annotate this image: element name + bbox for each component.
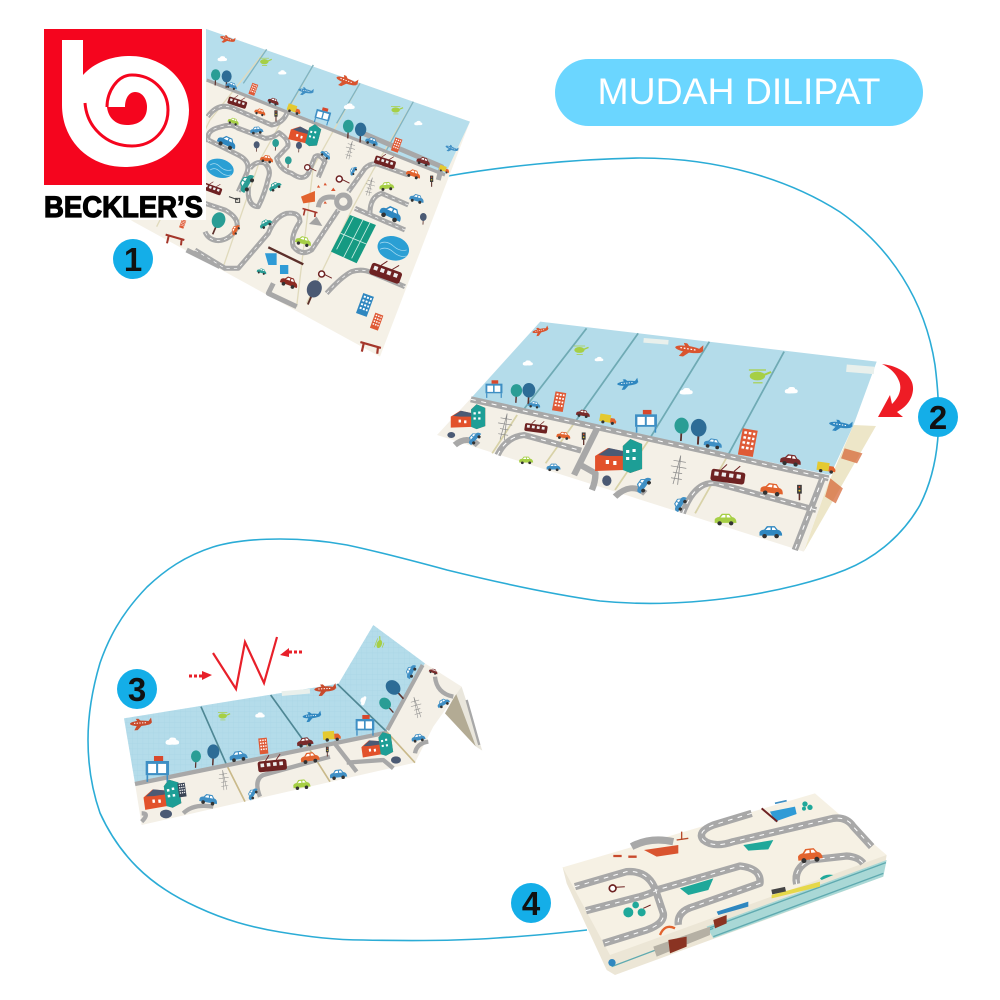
mat 3 illustrations [130, 636, 451, 818]
logo red centre [107, 92, 147, 125]
white backing for logo [40, 25, 206, 220]
mat 3 raised panel grid texture [338, 625, 425, 731]
red curved fold arrow [878, 364, 913, 417]
step badge 1 [113, 239, 153, 279]
mat step 3: mat folding in zigzag [124, 625, 482, 825]
step badge 1: 1 [124, 241, 142, 278]
step badge 3: 3 [128, 671, 146, 708]
mat step 1: fully unfolded play mat [90, 26, 470, 357]
mat 1 sky area [197, 26, 470, 175]
mat 2 illustrations [447, 325, 874, 538]
mat 3 cream ground [135, 732, 415, 825]
mat 2 road network [455, 399, 829, 550]
step badge 2: 2 [929, 399, 947, 436]
mat 4 road network [575, 813, 872, 943]
mat 3 sky grid texture [124, 684, 387, 783]
curved connector line [88, 158, 939, 941]
left dashed arrow [189, 671, 212, 680]
step badge 3 [117, 669, 157, 709]
mat step 2: mat with right panel folded under [437, 322, 877, 552]
heading pill: MUDAH DILIPAT [555, 59, 923, 126]
brand logo: Beckler's [44, 29, 203, 224]
mat 1 road network [187, 80, 445, 307]
mat 2 fold lines [492, 328, 784, 513]
logo red square [44, 29, 202, 185]
mat 4 road dashes [575, 813, 872, 943]
mat 4 top face [563, 793, 887, 955]
mat 1 sky illustrations [211, 33, 459, 174]
mat 1 tennis court [331, 215, 376, 263]
mat 4 side layers [563, 855, 887, 975]
mat 3 sky [124, 684, 387, 783]
mat 4 layer lines [612, 863, 886, 967]
mat 3 fold lines [201, 684, 415, 802]
mat 2 road dashes [471, 399, 829, 550]
mat 3 raised panel sky [338, 625, 425, 731]
step badge 2 [918, 397, 958, 437]
heading text: MUDAH DILIPAT [598, 70, 881, 112]
mat 2 folded underside panel [804, 425, 876, 552]
mat 4 teal edges [707, 860, 887, 938]
logo white spiral [62, 40, 189, 167]
mat step 4: fully folded mat [563, 793, 887, 975]
mat 2 underside colours [825, 448, 862, 503]
mat 2 sky area [471, 322, 877, 475]
mat 4 illustrations [608, 801, 833, 966]
mat 2 cream surface [437, 398, 830, 552]
mat 1 fold lines [157, 49, 413, 307]
zigzag line [213, 637, 277, 689]
mat 1 ground illustrations [166, 93, 433, 354]
logo wordmark: BECKLER’S [44, 191, 203, 224]
red zigzag fold symbol with arrows [189, 637, 302, 689]
step badge 4: 4 [522, 885, 541, 922]
mat 3 road network [135, 665, 479, 822]
heading background [555, 59, 923, 126]
mat 1 road dashes [195, 106, 408, 293]
mat 3 back leg shaded inside [445, 692, 476, 747]
mat 3 raised panel cream [387, 663, 462, 763]
right dashed arrow [280, 648, 302, 657]
logo thin red spiral line [85, 75, 168, 146]
mat 1 ponds [204, 156, 412, 264]
mat 1 cream surface [90, 26, 470, 357]
mat 3 back leg face [456, 687, 482, 751]
step badge 4 [511, 883, 551, 923]
